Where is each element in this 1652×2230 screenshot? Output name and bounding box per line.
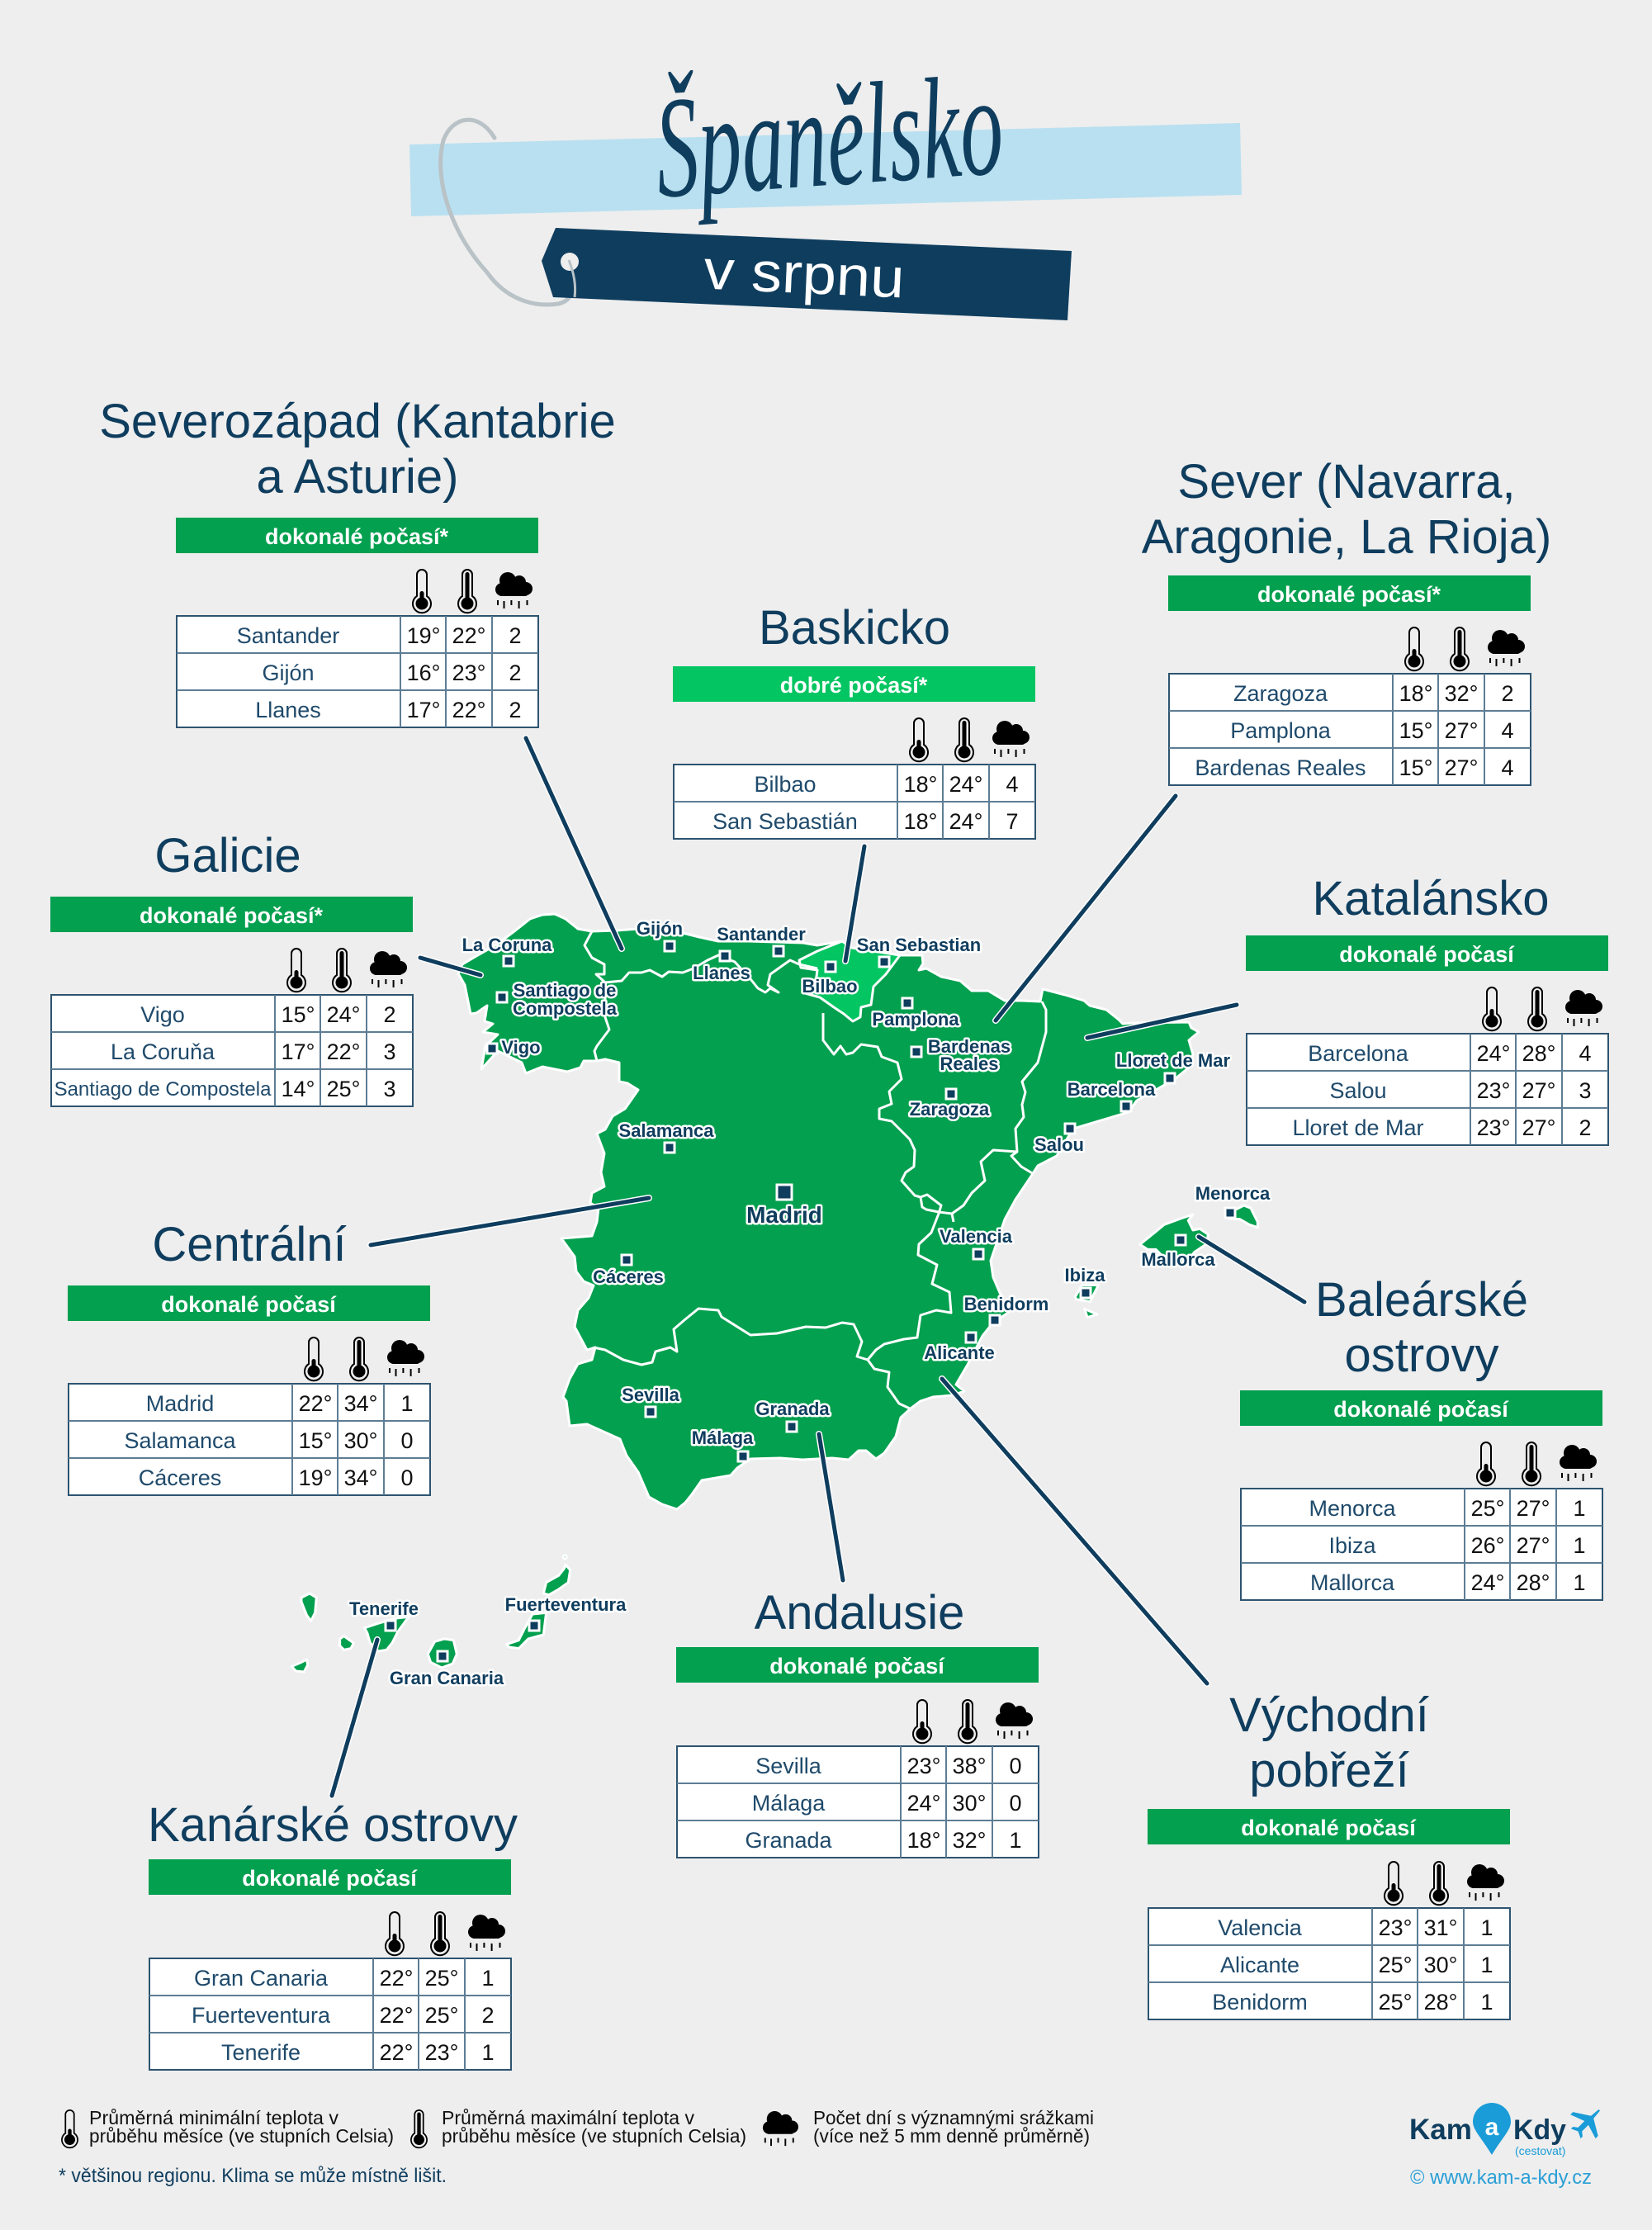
heading: Centrální xyxy=(152,1218,347,1271)
table: 28° xyxy=(1517,1570,1550,1595)
city labels: Santander xyxy=(717,924,806,945)
rating bar xyxy=(1240,1390,1602,1426)
rating bar: dokonalé počasí* xyxy=(265,524,449,549)
city labels: Gran Canaria xyxy=(390,1668,504,1688)
panel: Sever xyxy=(1142,455,1551,785)
table: Lloret de Mar xyxy=(1292,1115,1424,1140)
table xyxy=(69,1384,430,1495)
table: 25° xyxy=(1471,1496,1504,1521)
table: 18° xyxy=(1399,681,1432,706)
rating bar: dokonalé počasí xyxy=(242,1866,418,1891)
table: 15° xyxy=(1399,755,1432,780)
table: 15° xyxy=(1399,718,1432,743)
city labels: Madrid xyxy=(746,1202,822,1228)
panel: Kanárské ostrovy xyxy=(148,1798,518,2070)
logo: (cestovat) xyxy=(1515,2144,1565,2157)
table: 23° xyxy=(1477,1115,1510,1140)
table: Bardenas Reales xyxy=(1195,755,1366,780)
table: 28° xyxy=(1424,1990,1457,2015)
table: Santiago de Compostela xyxy=(54,1078,272,1101)
map: Balearic Islands xyxy=(1075,1205,1257,1318)
table: 38° xyxy=(953,1754,986,1778)
table: 2 xyxy=(509,660,522,685)
table: Alicante xyxy=(1220,1953,1299,1977)
panel: Galicie xyxy=(50,829,413,1106)
city labels: San Sebastian xyxy=(857,935,981,955)
city labels: Sevilla xyxy=(622,1385,680,1405)
table: 17° xyxy=(282,1039,315,1064)
table: Ibiza xyxy=(1328,1533,1376,1558)
table: Mallorca xyxy=(1310,1570,1395,1595)
table: 22° xyxy=(452,623,485,648)
table: 23° xyxy=(907,1754,940,1778)
table: San Sebastián xyxy=(712,809,858,834)
table: Bilbao xyxy=(754,772,817,797)
icon: map pin xyxy=(1473,2103,1511,2155)
table: 32° xyxy=(953,1828,986,1853)
tag string xyxy=(441,120,574,305)
heading: a Asturie) xyxy=(256,450,459,504)
table: 24° xyxy=(1477,1041,1510,1066)
table: 1 xyxy=(1009,1828,1022,1853)
table: 23° xyxy=(1379,1915,1412,1940)
table: 3 xyxy=(1579,1078,1592,1103)
table: Sevilla xyxy=(755,1754,822,1778)
table: 0 xyxy=(400,1465,414,1490)
table: 31° xyxy=(1424,1915,1457,1940)
rating bar: dokonalé počasí xyxy=(161,1292,337,1317)
legend: minimum temperature: Průměrná minimální teplota v xyxy=(89,2107,339,2128)
table: Zaragoza xyxy=(1233,681,1328,706)
footnote: * většinou regionu. Klima se může místně lišit. xyxy=(59,2165,447,2187)
city labels: Menorca xyxy=(1195,1183,1271,1204)
table: 2 xyxy=(383,1002,396,1027)
panel: Severozápad xyxy=(99,395,616,727)
panel: Andalusie xyxy=(676,1586,1039,1858)
table: Gijón xyxy=(262,660,315,685)
icons xyxy=(1477,1442,1597,1485)
table: Madrid xyxy=(146,1391,214,1416)
table: 14° xyxy=(282,1077,315,1101)
table: 25° xyxy=(425,1966,458,1991)
legend: maximum temperature: Průměrná maximální teplota v xyxy=(442,2107,694,2128)
table: 27° xyxy=(1517,1496,1550,1521)
region: Basque Country xyxy=(799,941,900,1021)
table: 4 xyxy=(1501,755,1514,780)
city labels xyxy=(349,918,1271,1688)
table: 4 xyxy=(1579,1041,1592,1066)
city labels: Granada xyxy=(755,1399,830,1419)
table: 34° xyxy=(344,1465,377,1490)
table xyxy=(1247,1034,1608,1145)
table: 4 xyxy=(1006,772,1019,797)
icons xyxy=(1385,1862,1504,1905)
city labels: La Coruna xyxy=(462,935,552,955)
table: 1 xyxy=(1480,1953,1493,1977)
legend: maximum temperature: průběhu měsíce (ve stupních Celsia) xyxy=(442,2125,746,2147)
city labels: Málaga xyxy=(692,1427,754,1448)
table: 22° xyxy=(380,2040,413,2065)
table: 18° xyxy=(904,772,937,797)
table: 2 xyxy=(481,2003,495,2028)
rating bar xyxy=(673,666,1035,702)
heading: Galicie xyxy=(154,829,301,883)
city markers xyxy=(386,941,1235,1661)
table: 27° xyxy=(1445,718,1478,743)
title block xyxy=(409,44,1242,320)
tag with month xyxy=(542,228,1072,320)
city labels: Vigo xyxy=(501,1037,541,1058)
table: 30° xyxy=(344,1428,377,1453)
table: 24° xyxy=(949,809,982,834)
city labels: Compostela xyxy=(513,998,618,1019)
table: Valencia xyxy=(1218,1915,1303,1940)
table: 2 xyxy=(509,623,522,648)
city labels: Gijón xyxy=(637,918,683,939)
city labels: Alicante xyxy=(924,1342,995,1363)
rating bar: dokonalé počasí* xyxy=(140,903,324,928)
legend: minimum temperature: průběhu měsíce (ve stupních Celsia) xyxy=(89,2125,394,2147)
logo: a xyxy=(1485,2114,1499,2141)
table: 17° xyxy=(407,698,440,722)
rating bar: dokonalé počasí xyxy=(769,1654,945,1678)
table: 34° xyxy=(344,1391,377,1416)
table: 25° xyxy=(425,2003,458,2028)
table: Cáceres xyxy=(139,1465,221,1490)
table xyxy=(1148,1908,1510,2019)
table: 24° xyxy=(327,1002,360,1027)
rating bar xyxy=(1168,575,1531,611)
legend xyxy=(62,2107,1094,2147)
city labels: Reales xyxy=(940,1053,998,1074)
panel: Katalánsko xyxy=(1246,872,1608,1145)
city labels: Fuerteventura xyxy=(505,1594,627,1615)
table: 23° xyxy=(425,2040,458,2065)
table: 0 xyxy=(1009,1791,1022,1816)
rating bar xyxy=(1148,1809,1510,1844)
table: 15° xyxy=(299,1428,332,1453)
rating bar: dokonalé počasí xyxy=(1339,942,1515,967)
table: Barcelona xyxy=(1308,1041,1409,1066)
table xyxy=(1241,1489,1602,1600)
table: 1 xyxy=(1480,1915,1493,1940)
table: Granada xyxy=(745,1828,833,1853)
city labels: Pamplona xyxy=(872,1009,959,1030)
table: 25° xyxy=(327,1077,360,1101)
table: 2 xyxy=(1501,681,1514,706)
rating bar xyxy=(149,1859,511,1895)
table: La Coruňa xyxy=(111,1039,215,1064)
logo: Kam xyxy=(1409,2114,1472,2146)
table: 22° xyxy=(299,1391,332,1416)
table: 0 xyxy=(1009,1754,1022,1778)
table: Salou xyxy=(1329,1078,1387,1103)
heading: Katalánsko xyxy=(1313,872,1549,926)
table: 27° xyxy=(1522,1115,1555,1140)
title band xyxy=(409,123,1242,216)
table: 1 xyxy=(1573,1496,1586,1521)
table xyxy=(1169,674,1531,785)
table: 23° xyxy=(452,660,485,685)
heading: ostrovy xyxy=(1345,1328,1498,1382)
city labels: Bilbao xyxy=(802,976,858,997)
leader lines xyxy=(332,738,1304,1796)
legend: rain days xyxy=(763,2107,1094,2147)
table: 19° xyxy=(299,1465,332,1490)
heading: Sever (Navarra, xyxy=(1177,455,1516,509)
title text: Španělsko xyxy=(650,44,1008,228)
city labels: Tenerife xyxy=(349,1598,419,1619)
table: 24° xyxy=(907,1791,940,1816)
table: 2 xyxy=(509,698,522,722)
panel: Východní pobřeží xyxy=(1148,1688,1510,2019)
city labels: Lloret de Mar xyxy=(1116,1050,1231,1071)
table: 24° xyxy=(1471,1570,1504,1595)
table: 30° xyxy=(1424,1953,1457,1977)
city labels: Valencia xyxy=(940,1226,1013,1247)
table: Vigo xyxy=(140,1002,185,1027)
rating bar: dokonalé počasí* xyxy=(1257,582,1441,607)
icons xyxy=(305,1338,424,1380)
city labels: Cáceres xyxy=(593,1267,664,1287)
heading: Severozápad (Kantabrie xyxy=(99,395,616,448)
rating bar xyxy=(68,1285,430,1321)
region borders xyxy=(585,931,1046,1409)
table: Menorca xyxy=(1309,1496,1397,1521)
table: 25° xyxy=(1379,1953,1412,1977)
city labels: Zaragoza xyxy=(910,1099,990,1120)
logo xyxy=(1409,2103,1600,2157)
table: 4 xyxy=(1501,718,1514,743)
tag with month: v srpnu xyxy=(703,239,906,310)
panel: Baleárské ostrovy xyxy=(1240,1273,1602,1600)
website link: © www.kam-a-kdy.cz xyxy=(1410,2166,1592,2189)
table: 1 xyxy=(1573,1570,1586,1595)
table: 22° xyxy=(380,2003,413,2028)
city labels: Salou xyxy=(1034,1134,1084,1155)
table: 22° xyxy=(452,698,485,722)
table: Llanes xyxy=(255,698,321,722)
icons xyxy=(913,1700,1033,1743)
table xyxy=(677,1746,1039,1858)
heading: pobřeží xyxy=(1249,1744,1409,1797)
heading: Baskicko xyxy=(759,601,950,655)
rating bar xyxy=(676,1647,1039,1683)
table: 23° xyxy=(1477,1078,1510,1103)
icon: plane xyxy=(1570,2109,1600,2138)
table: 18° xyxy=(907,1828,940,1853)
city labels: Llanes xyxy=(693,963,750,983)
table: Gran Canaria xyxy=(194,1966,329,1991)
table: Fuerteventura xyxy=(192,2003,331,2028)
table: 1 xyxy=(1480,1990,1493,2015)
heading: Kanárské ostrovy xyxy=(148,1798,518,1852)
table: Pamplona xyxy=(1230,718,1332,743)
rating bar xyxy=(50,897,413,932)
table: 16° xyxy=(407,660,440,685)
table: 3 xyxy=(383,1039,396,1064)
rating bar: dokonalé počasí xyxy=(1241,1816,1417,1840)
table: 7 xyxy=(1006,809,1019,834)
city labels: Santiago de xyxy=(514,980,616,1001)
logo: Kdy xyxy=(1513,2114,1566,2146)
heading: Východní xyxy=(1229,1688,1429,1742)
map: Canary Islands xyxy=(291,1555,570,1672)
city labels: Mallorca xyxy=(1141,1249,1215,1270)
table: 27° xyxy=(1517,1533,1550,1558)
panel: Baskicko xyxy=(673,601,1035,839)
legend: rain days: Počet dní s významnými srážkami xyxy=(813,2107,1094,2128)
rating bar xyxy=(1246,935,1608,971)
table: 1 xyxy=(1573,1533,1586,1558)
table: 3 xyxy=(383,1077,396,1101)
map: mainland Spain xyxy=(458,914,1199,1509)
table: 22° xyxy=(380,1966,413,1991)
icons xyxy=(413,570,533,613)
legend: minimum temperature xyxy=(62,2107,394,2147)
panel: Centrální xyxy=(68,1218,430,1495)
table xyxy=(674,765,1035,839)
table: 24° xyxy=(949,772,982,797)
table: 19° xyxy=(407,623,440,648)
heading: Baleárské xyxy=(1315,1273,1528,1327)
table: 26° xyxy=(1471,1533,1504,1558)
table: 1 xyxy=(481,2040,495,2065)
table: 15° xyxy=(282,1002,315,1027)
table: 22° xyxy=(327,1039,360,1064)
table: 30° xyxy=(953,1791,986,1816)
icons xyxy=(910,718,1030,761)
heading: Aragonie, La Rioja) xyxy=(1142,510,1551,564)
table: 27° xyxy=(1445,755,1478,780)
table: 18° xyxy=(904,809,937,834)
table: 0 xyxy=(400,1428,414,1453)
legend: rain days: (více než 5 mm denně průměrně) xyxy=(813,2125,1090,2147)
city labels: Ibiza xyxy=(1065,1265,1105,1285)
icons xyxy=(1483,987,1602,1030)
city labels: Benidorm xyxy=(964,1294,1048,1314)
table: 25° xyxy=(1379,1990,1412,2015)
city labels: Barcelona xyxy=(1067,1079,1156,1100)
icons xyxy=(287,949,407,992)
heading: Andalusie xyxy=(755,1586,964,1640)
table: 1 xyxy=(481,1966,495,1991)
table xyxy=(177,616,538,727)
rating bar: dobré počasí* xyxy=(780,673,928,698)
table: 28° xyxy=(1522,1041,1555,1066)
table: Salamanca xyxy=(124,1428,237,1453)
rating bar: dokonalé počasí xyxy=(1333,1397,1509,1422)
table xyxy=(51,995,413,1106)
icons xyxy=(386,1912,505,1955)
table: 1 xyxy=(400,1391,414,1416)
city labels: Bardenas xyxy=(928,1036,1011,1057)
table: 32° xyxy=(1445,681,1478,706)
legend: maximum temperature xyxy=(411,2107,746,2147)
table: Málaga xyxy=(752,1791,826,1816)
table: 2 xyxy=(1579,1115,1592,1140)
table: Benidorm xyxy=(1212,1990,1308,2015)
table: 27° xyxy=(1522,1078,1555,1103)
region: mainland shape xyxy=(458,914,1199,1509)
table: Santander xyxy=(237,623,339,648)
icons xyxy=(1405,627,1525,670)
table xyxy=(149,1958,511,2070)
city labels: Salamanca xyxy=(619,1120,714,1141)
table: Tenerife xyxy=(221,2040,301,2065)
rating bar xyxy=(176,518,538,553)
